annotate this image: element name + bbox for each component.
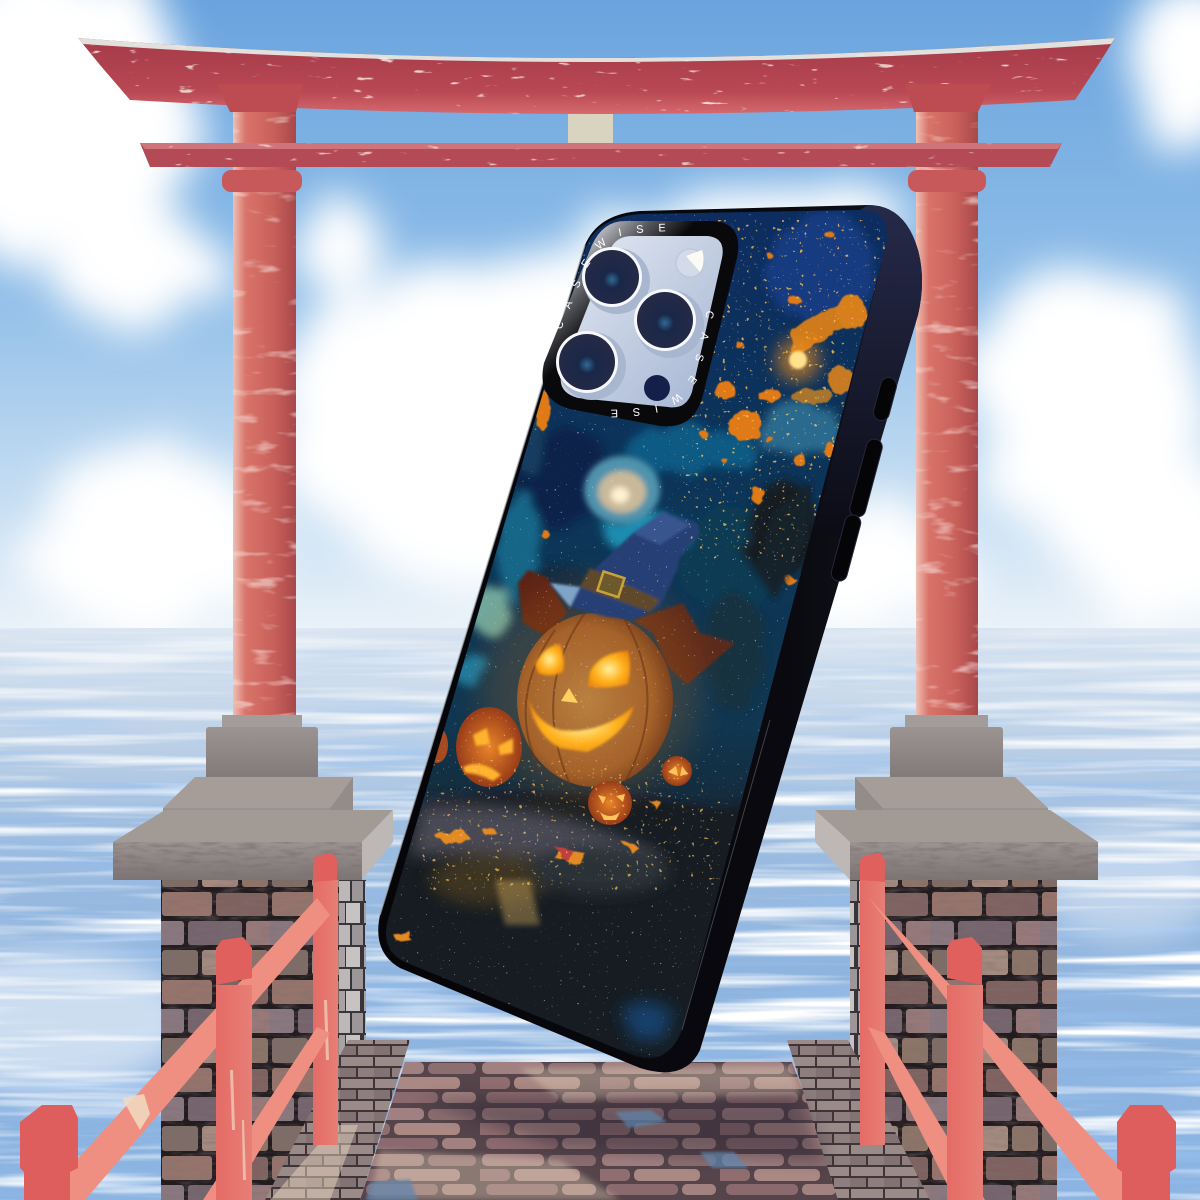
sunlit pale bricks left (270, 1125, 358, 1200)
far post (313, 853, 338, 1145)
left edge highlight (380, 245, 585, 915)
sky background (0, 0, 1200, 630)
camera island (542, 221, 738, 426)
upper rail (40, 898, 330, 1200)
left stone base (113, 715, 393, 1200)
lens middle (634, 289, 704, 358)
brick pillar (850, 880, 1057, 1200)
right beam collar (905, 84, 991, 112)
galaxy swirl (584, 456, 660, 524)
lower rail (203, 1027, 330, 1200)
brand text upper left: CASEWISE (558, 224, 666, 328)
lower beam (140, 143, 1062, 167)
hat buckle (597, 571, 625, 597)
stone tier (163, 777, 353, 838)
witch hat cloth left (518, 570, 567, 637)
mid post (216, 937, 252, 1200)
pumpkin eyes (535, 644, 564, 675)
flash (676, 249, 704, 277)
witch hat (550, 512, 700, 620)
right pillar (908, 98, 986, 720)
column base (206, 715, 318, 790)
left curb (265, 1040, 410, 1200)
phone shadow (420, 1095, 825, 1160)
center strut (568, 104, 613, 144)
jack-o-lantern pumpkin (480, 580, 700, 800)
right curb (787, 1040, 930, 1200)
near post (1117, 1105, 1176, 1200)
dark tree trunk (755, 482, 812, 600)
column base (890, 715, 1003, 790)
paint speckles (370, 200, 910, 1080)
ground (386, 794, 740, 1057)
small pumpkin left (456, 707, 522, 787)
clouds (0, 0, 1200, 630)
phone case (378, 205, 922, 1072)
side buttons (829, 376, 898, 583)
back artwork (386, 210, 887, 1058)
brick pillar (161, 880, 366, 1200)
mid post (947, 937, 983, 1200)
autumn leaves and tree (535, 232, 867, 584)
orange speckles on ground (420, 760, 720, 890)
pumpkin mouth (528, 698, 634, 752)
cobbled path (360, 1062, 845, 1200)
camera ring (542, 221, 738, 426)
sea (0, 628, 1200, 1200)
lens bottom (556, 331, 626, 400)
glowing lantern (776, 338, 820, 382)
left pillar (222, 98, 302, 720)
left beam collar (217, 84, 303, 112)
upper rail (868, 897, 1150, 1200)
lens top (582, 247, 650, 314)
stone slab (113, 810, 393, 880)
puddles (366, 1110, 748, 1200)
small pumpkin right (662, 756, 692, 786)
orange speckles (680, 220, 890, 560)
inner edge line (682, 720, 770, 1030)
torii gate (78, 38, 1115, 720)
far left pumpkin (426, 727, 448, 763)
side highlight top (815, 205, 922, 540)
far post (860, 853, 885, 1145)
camera plate (561, 236, 723, 407)
stone tier (855, 777, 1048, 838)
stone walkway (265, 1040, 930, 1200)
pumpkin nose (561, 688, 578, 703)
witch hat cloth right (633, 603, 735, 685)
right railing (860, 853, 1176, 1200)
lidar sensor (644, 375, 670, 401)
right stone base (815, 715, 1098, 1200)
left railing (20, 853, 338, 1200)
brand text lower right: CASEWISE (611, 311, 714, 418)
stone slab (815, 810, 1098, 880)
painted sky swirls (457, 210, 877, 794)
small pumpkin bottom (588, 781, 632, 825)
top beam (78, 38, 1115, 114)
sunlit patches (370, 1066, 800, 1200)
near post (20, 1105, 78, 1200)
lower rail (868, 1027, 985, 1200)
case body (378, 205, 922, 1072)
